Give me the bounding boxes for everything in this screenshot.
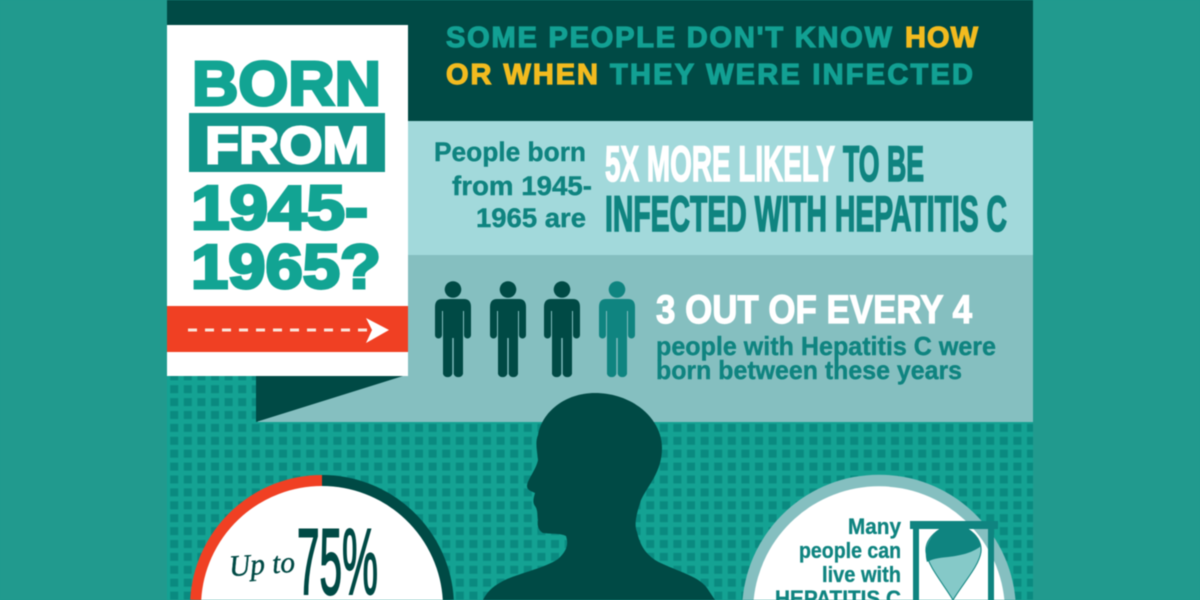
stat: 5x more likely to be infected [605,136,1007,242]
icon: hourglass [910,521,998,600]
heading: some people don't know: THEY WERE INFECTED [610,59,973,91]
text: up to 75% [228,509,378,600]
heading: born: BORN [192,50,381,119]
heading: years: 1965? [191,233,381,302]
heading: years: 1945- [191,174,368,243]
text: many people can live with hepatitis c: people can [799,538,901,563]
heading: some people don't know: OR WHEN [446,59,598,91]
text: people with hepatitis c [656,331,996,385]
text: people born from 1945-1965 are: from 1945- [452,171,592,201]
panel: hourglass circle [742,475,1016,600]
text: people born from 1945-1965 are: 1965 are [476,203,586,233]
icon: four people [435,281,635,377]
stat: 3 out of every 4: 3 OUT OF EVERY 4 [656,288,973,332]
text: people with hepatitis c: born between these years [656,355,962,385]
dark ring arc [322,480,448,600]
heading: some people don't know [446,22,979,91]
stat: 5x more likely to be infected: 5X MORE LIKELY [605,136,835,192]
icon: head silhouette [483,393,715,600]
panel: dark header band [167,0,1033,121]
heading: some people don't know: HOW [905,22,979,54]
stat: 5x more likely to be infected: TO BE [843,136,924,192]
panel: born from card [167,25,408,376]
text: many people can live with hepatitis c: live with [822,562,901,587]
heading: years [191,174,381,302]
panel: 75 percent circle [195,480,449,600]
text: people born from 1945-1965 are: People born [434,137,586,167]
panel: 5x more likely band [408,121,1033,255]
red ring arc [196,480,322,600]
dark triangle fold [256,376,403,422]
text: many people can live with hepatitis c [775,514,902,600]
text: up to 75%: Up to [228,546,296,583]
red arrow bar [167,306,408,352]
panel: 3 out of 4 band [258,255,1033,422]
heading: some people don't know: SOME PEOPLE DON'T KNOW [446,22,893,54]
heading: from box: FROM [205,117,369,175]
text: many people can live with hepatitis c: Many [848,514,902,539]
text: people born from 1945-1965 are [434,137,592,233]
text: people with hepatitis c: people with Hepatitis C were [656,331,996,361]
patterned teal panel [167,376,1033,600]
